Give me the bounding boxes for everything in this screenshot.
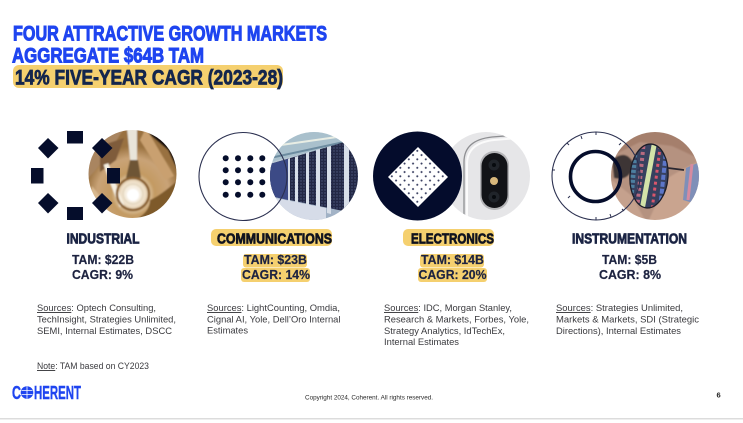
panel: communications xyxy=(199,132,358,336)
sources: industrial: Sources: Optech Consulting, xyxy=(37,303,156,314)
note: Note: TAM based on CY2023 xyxy=(37,361,149,372)
metrics: electronics xyxy=(418,252,487,282)
sources: communications: Estimates xyxy=(207,326,248,336)
metrics: communications: TAM: $23B xyxy=(244,252,307,267)
logo: Coherent: HERENT xyxy=(34,383,81,403)
sources: industrial xyxy=(37,303,176,337)
icon: dot grid in outlined circle xyxy=(199,132,287,220)
metrics: instrumentation: CAGR: 8% xyxy=(599,267,661,282)
logo: Coherent xyxy=(12,383,81,403)
logo: Coherent: C xyxy=(12,383,21,403)
metrics: electronics: CAGR: 20% xyxy=(418,267,487,282)
subtitle highlight: 14% FIVE-YEAR CAGR (2023-28) xyxy=(15,66,283,90)
icon: ring of squares xyxy=(31,131,120,220)
copyright: Copyright 2024, Coherent. All rights reserved. xyxy=(305,394,433,402)
label: industrial: INDUSTRIAL xyxy=(66,232,140,248)
sources: communications: Sources: LightCounting, Omdia, xyxy=(207,303,340,314)
panel: industrial xyxy=(31,128,180,337)
title: FOUR ATTRACTIVE GROWTH MARKETS xyxy=(13,22,327,46)
label: electronics: ELECTRONICS xyxy=(411,232,494,248)
sources: industrial: SEMI, Internal Estimates, DSCC xyxy=(37,326,172,337)
metrics: communications xyxy=(241,252,310,282)
label: instrumentation: INSTRUMENTATION xyxy=(572,232,687,248)
photo: phone camera xyxy=(452,132,530,220)
sources: communications xyxy=(207,303,340,336)
sources: communications: Cignal AI, Yole, Dell’Oro Internal xyxy=(207,314,340,326)
photo: laser nozzle xyxy=(88,130,176,218)
title xyxy=(12,22,327,90)
panel: instrumentation xyxy=(552,130,702,337)
panel: electronics xyxy=(373,132,530,348)
metrics: communications: CAGR: 14% xyxy=(242,267,310,282)
metrics: industrial: CAGR: 9% xyxy=(72,267,133,282)
photo: eye with glasses xyxy=(611,132,699,220)
page number: 6 xyxy=(716,390,721,400)
metrics: industrial: TAM: $22B xyxy=(72,252,134,267)
sources: instrumentation: Directions), Internal Estimates xyxy=(556,326,681,337)
icon: dotted diamond in navy circle xyxy=(373,132,462,220)
sources: industrial: TechInsight, Strategies Unlimited, xyxy=(37,314,176,326)
sources: electronics: Sources: IDC, Morgan Stanley, xyxy=(384,303,512,314)
label: electronics xyxy=(403,229,494,248)
sources: instrumentation xyxy=(556,303,699,337)
sources: instrumentation: Sources: Strategies Unlimited, xyxy=(556,303,683,314)
metrics: instrumentation: TAM: $5B xyxy=(602,252,657,267)
metrics: instrumentation xyxy=(599,252,661,282)
photo: data center xyxy=(270,132,358,222)
sources: electronics: Strategy Analytics, IdTechEx, xyxy=(384,326,505,337)
sources: electronics: Research & Markets, Forbes, Yole, xyxy=(384,314,529,326)
sources: electronics: Internal Estimates xyxy=(384,337,459,348)
sources: instrumentation: Markets & Markets, SDI (Strategic xyxy=(556,314,699,326)
metrics: electronics: TAM: $14B xyxy=(421,252,484,267)
metrics: industrial xyxy=(72,252,134,282)
icon: logo globe xyxy=(21,386,33,399)
title: AGGREGATE $64B TAM xyxy=(12,44,204,68)
label: communications: COMMUNICATIONS xyxy=(217,232,332,248)
icon: concentric rings with ticks xyxy=(552,132,640,220)
sources: electronics xyxy=(384,303,529,348)
